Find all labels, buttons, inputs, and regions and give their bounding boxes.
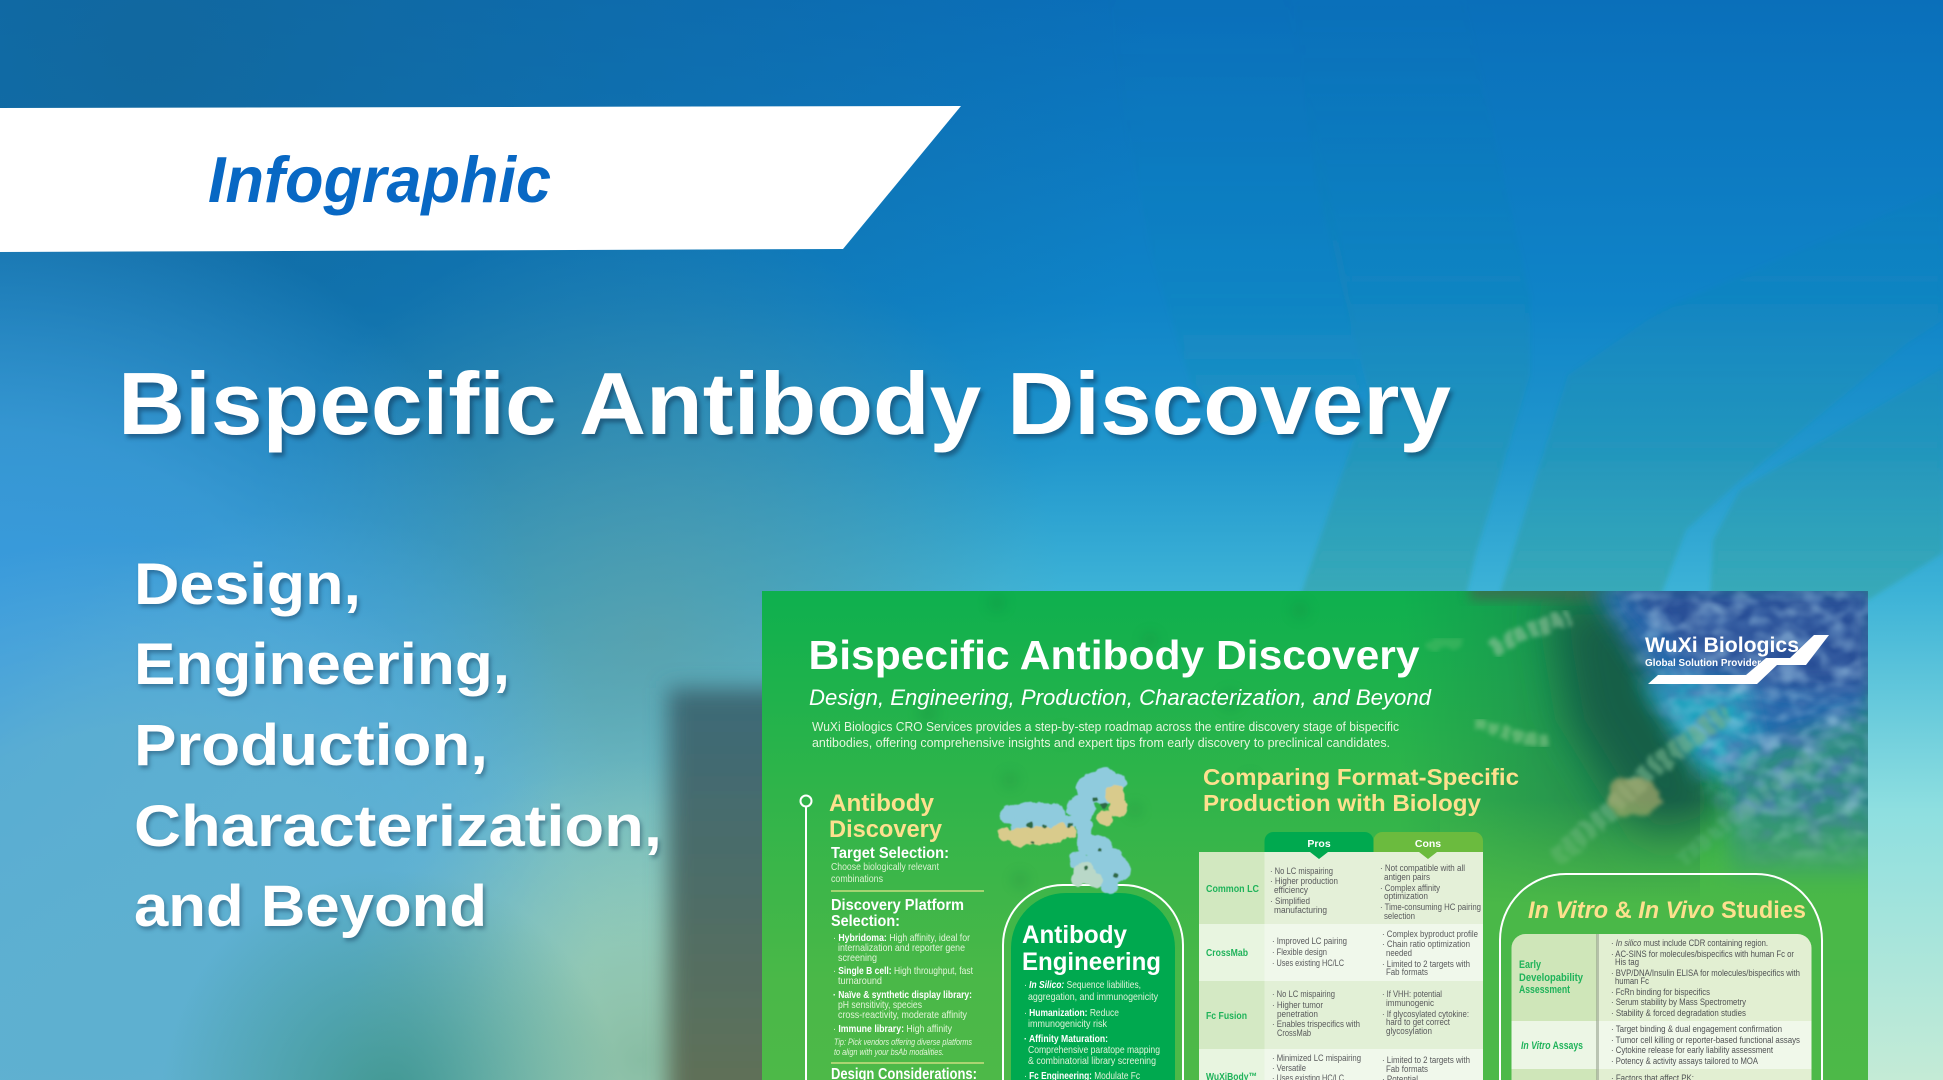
cons column text: · Not compatible with all bbox=[1380, 863, 1465, 874]
target selection: combinations bbox=[831, 874, 883, 885]
studies item text: · Potency & activity assays tailored to MOA bbox=[1611, 1056, 1758, 1067]
cons column text: · Complex byproduct profile bbox=[1382, 929, 1478, 940]
pros header: Pros bbox=[1307, 838, 1331, 850]
card intro paragraph: antibodies, offering comprehensive insights and expert tips from early discovery to preclinical candidates. bbox=[812, 735, 1390, 750]
pros column text: · Minimized LC mispairing bbox=[1272, 1053, 1361, 1064]
cons column text: immunogenic bbox=[1386, 998, 1434, 1009]
timeline marker bbox=[800, 796, 812, 1080]
row labels: Common LC bbox=[1206, 883, 1259, 895]
pros column text: penetration bbox=[1277, 1009, 1318, 1020]
pros header bbox=[1264, 832, 1374, 859]
target selection bbox=[831, 846, 948, 882]
studies table backgrounds bbox=[1512, 934, 1812, 1080]
subtitle list: Design, bbox=[134, 552, 361, 617]
studies item text bbox=[1611, 938, 1800, 1080]
pros column text: · No LC mispairing bbox=[1270, 866, 1333, 877]
engineering list bbox=[1024, 980, 1160, 1080]
card intro paragraph bbox=[812, 719, 1399, 750]
subtitle list: Engineering, bbox=[134, 632, 510, 697]
row labels: CrossMab bbox=[1206, 947, 1248, 959]
engineering list: aggregation, and immunogenicity bbox=[1028, 992, 1159, 1003]
row labels: Fc Fusion bbox=[1206, 1010, 1247, 1022]
studies item text: · Stability & forced degradation studies bbox=[1611, 1008, 1746, 1019]
cons column text: · Time-consuming HC pairing bbox=[1380, 902, 1481, 913]
card intro paragraph: WuXi Biologics CRO Services provides a step-by-step roadmap across the entire discovery stage of bispecific bbox=[812, 719, 1399, 734]
card title: Bispecific Antibody Discovery bbox=[808, 632, 1420, 678]
heading: antibody engineering: Antibody bbox=[1022, 921, 1127, 949]
banner label: Infographic bbox=[208, 143, 551, 216]
pros column text: CrossMab bbox=[1277, 1028, 1311, 1039]
discovery platform selection: turnaround bbox=[838, 976, 882, 987]
subtitle list: Production, bbox=[134, 713, 488, 778]
main title: Bispecific Antibody Discovery bbox=[118, 354, 1451, 453]
studies item text: · Cytokine release for early liability assessment bbox=[1611, 1045, 1773, 1056]
pros column text: manufacturing bbox=[1274, 905, 1327, 916]
studies item text: · Tumor cell killing or reporter-based functional assays bbox=[1611, 1035, 1800, 1046]
heading: antibody discovery: Antibody bbox=[829, 790, 935, 817]
cons column text: needed bbox=[1386, 948, 1412, 959]
engineering list: Comprehensive paratope mapping bbox=[1028, 1045, 1160, 1056]
subtitle list bbox=[134, 552, 662, 939]
cons column text: antigen pairs bbox=[1384, 872, 1430, 883]
discovery platform selection: internalization and reporter gene bbox=[838, 943, 965, 954]
pros column text: · Higher tumor bbox=[1272, 1000, 1324, 1011]
discovery platform selection: pH sensitivity, species bbox=[838, 1000, 922, 1011]
card subtitle: Design, Engineering, Production, Characterization, and Beyond bbox=[809, 685, 1432, 710]
studies row labels: In Vitro Assays bbox=[1521, 1040, 1583, 1052]
pros column text: · Enables trispecifics with bbox=[1272, 1019, 1360, 1030]
heading: in vitro and in vivo studies: In Vitro & In Vivo Studies bbox=[1528, 897, 1806, 924]
cons column text: glycosylation bbox=[1386, 1026, 1432, 1037]
heading: antibody engineering: Engineering bbox=[1022, 948, 1161, 976]
pros column text: · Improved LC pairing bbox=[1272, 936, 1347, 947]
logo: WuXi Biologics: Global Solution Provider bbox=[1645, 658, 1761, 669]
pros column text: · Uses existing HC/LC bbox=[1272, 958, 1344, 969]
pros column text: · Flexible design bbox=[1272, 947, 1327, 958]
discovery platform selection: Tip: Pick vendors offering diverse platforms bbox=[834, 1037, 972, 1047]
subtitle list: and Beyond bbox=[134, 874, 487, 939]
heading: antibody discovery: Discovery bbox=[829, 816, 943, 843]
row labels bbox=[1206, 883, 1259, 1080]
card cell texture bbox=[923, 601, 1302, 718]
heading: comparing format-specific bbox=[1203, 764, 1519, 816]
cons column text: · If glycosylated cytokine: bbox=[1382, 1009, 1469, 1020]
discovery platform selection: · Naïve & synthetic display library: bbox=[833, 990, 972, 1001]
blurred shadow block behind card bbox=[668, 688, 798, 1080]
panel: in vitro and in vivo studies bbox=[1500, 874, 1822, 1080]
discovery platform selection: cross-reactivity, moderate affinity bbox=[838, 1010, 968, 1021]
discovery platform selection: · Hybridoma: High affinity, ideal for bbox=[833, 933, 971, 944]
logo: WuXi Biologics: WuXi Biologics bbox=[1645, 634, 1799, 657]
subtitle list: Characterization, bbox=[134, 794, 662, 859]
engineering list: · Humanization: Reduce bbox=[1024, 1008, 1119, 1019]
pros column text: · No LC mispairing bbox=[1272, 989, 1335, 1000]
discovery platform selection: screening bbox=[838, 953, 877, 964]
cons header bbox=[1374, 832, 1483, 859]
cons column text: Fab formats bbox=[1386, 1064, 1428, 1075]
comparison table backgrounds bbox=[1199, 852, 1483, 1080]
studies item text: · Serum stability by Mass Spectrometry bbox=[1611, 997, 1746, 1008]
heading: comparing format-specific: Comparing Format-Specific bbox=[1203, 764, 1519, 790]
studies item text: · BVP/DNA/Insulin ELISA for molecules/bispecifics with bbox=[1611, 968, 1800, 979]
studies item text: human Fc bbox=[1615, 976, 1649, 987]
discovery platform selection: · Single B cell: High throughput, fast bbox=[833, 966, 973, 977]
target selection: Choose biologically relevant bbox=[831, 862, 939, 873]
studies item text: · FcRn binding for bispecifics bbox=[1611, 987, 1710, 998]
cons column text: · Limited to 2 targets with bbox=[1382, 959, 1470, 970]
heading: antibody discovery bbox=[829, 790, 943, 843]
discovery platform selection: to align with your bsAb modalities. bbox=[834, 1047, 944, 1057]
cons column text: · Chain ratio optimization bbox=[1382, 939, 1470, 950]
studies item text: · AC-SINS for molecules/bispecifics with human Fc or bbox=[1611, 949, 1795, 960]
cons column text: Fab formats bbox=[1386, 967, 1428, 978]
cons column text: optimization bbox=[1384, 891, 1428, 902]
studies row labels: Assessment bbox=[1519, 984, 1570, 996]
studies item text: His tag bbox=[1615, 957, 1639, 968]
heading: antibody engineering bbox=[1022, 925, 1160, 975]
studies item text: · Target binding & dual engagement confirmation bbox=[1611, 1024, 1782, 1035]
cons column text bbox=[1380, 863, 1481, 1080]
pros column text: · Higher production bbox=[1270, 876, 1338, 887]
cons column text: · If VHH: potential bbox=[1382, 989, 1442, 1000]
logo: WuXi Biologics bbox=[1645, 634, 1829, 684]
engineering list: & combinatorial library screening bbox=[1028, 1056, 1156, 1067]
pros column text bbox=[1270, 866, 1361, 1080]
panel: antibody discovery bbox=[829, 790, 984, 1080]
discovery platform selection bbox=[831, 897, 973, 1057]
cons column text: · Complex affinity bbox=[1380, 883, 1440, 894]
panel: antibody engineering bbox=[1003, 885, 1183, 1080]
studies item text: · In silico must include CDR containing region. bbox=[1611, 938, 1768, 949]
icon: antibody molecule bbox=[998, 767, 1131, 894]
translucent ribbon shapes behind title bbox=[1110, 0, 1943, 600]
panel: comparing format-specific production bbox=[1199, 764, 1519, 1080]
engineering list: immunogenicity risk bbox=[1028, 1019, 1108, 1030]
card photographic background: molecular imagery bbox=[1424, 591, 1868, 924]
cons column text: selection bbox=[1384, 911, 1415, 922]
target selection: Target Selection: bbox=[831, 845, 949, 862]
engineering list: · Affinity Maturation: bbox=[1024, 1034, 1108, 1045]
cons column text: hard to get correct bbox=[1386, 1017, 1450, 1028]
banner bbox=[0, 106, 961, 252]
pros column text: · Simplified bbox=[1270, 896, 1310, 907]
discovery platform selection: Discovery Platform bbox=[831, 897, 964, 914]
studies row labels: Developability bbox=[1519, 972, 1584, 984]
discovery platform selection: Selection: bbox=[831, 913, 900, 930]
engineering list: · In Silico: Sequence liabilities, bbox=[1024, 980, 1141, 991]
cons header: Cons bbox=[1415, 838, 1441, 850]
heading: comparing format-specific: Production with Biology bbox=[1203, 790, 1481, 816]
pros column text: · Versatile bbox=[1272, 1063, 1306, 1074]
studies row labels bbox=[1519, 959, 1584, 1052]
studies row labels: Early bbox=[1519, 959, 1542, 971]
discovery platform selection: · Immune library: High affinity bbox=[833, 1024, 953, 1035]
cons column text: · Limited to 2 targets with bbox=[1382, 1055, 1470, 1066]
panel: infographic preview card bbox=[762, 580, 1875, 1080]
pros column text: efficiency bbox=[1274, 885, 1308, 896]
